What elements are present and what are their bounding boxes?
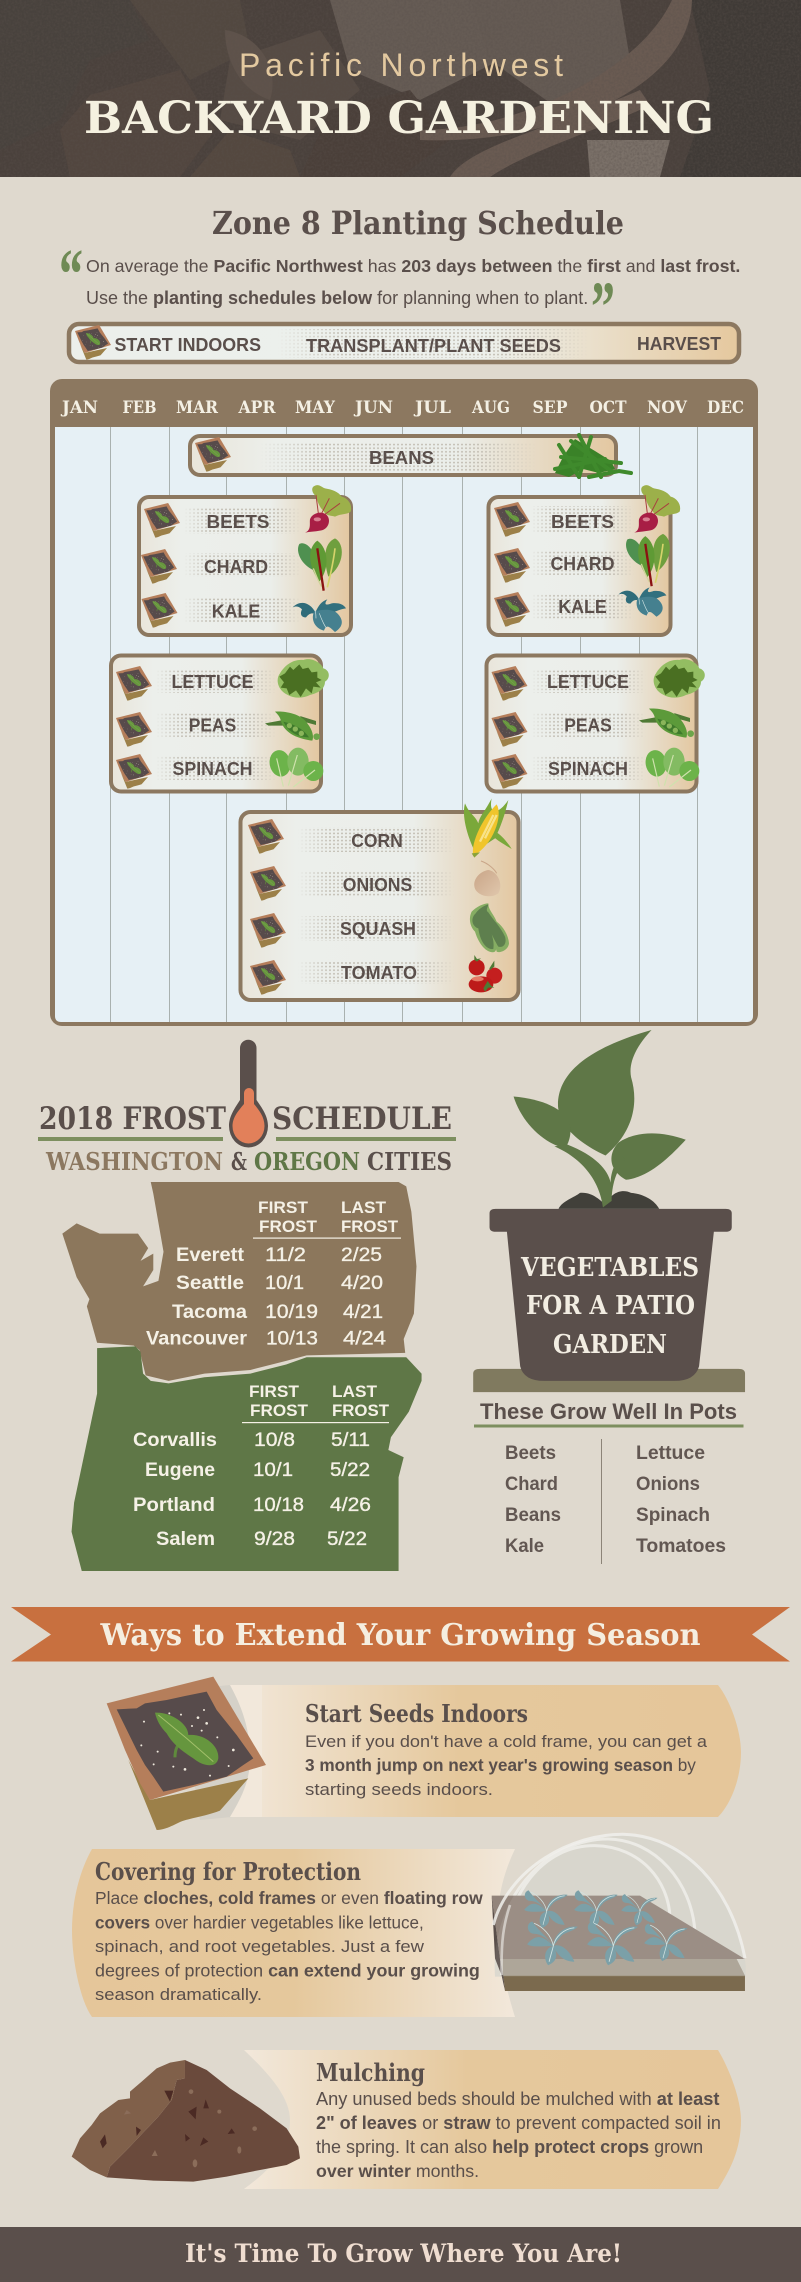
halftone band (278, 329, 588, 358)
map: Oregon frost table (72, 1346, 422, 1571)
icon: plant and pot (473, 1030, 745, 1392)
tip: covering for protection (72, 1833, 746, 2017)
heading: Zone 8 Planting Schedule: Zone 8 Planting Schedule (212, 204, 624, 242)
crop box: beets chard kale, spring: KALE (212, 600, 260, 622)
month labels: OCT (590, 398, 627, 417)
legend: transplant: TRANSPLANT/PLANT SEEDS (306, 336, 561, 356)
icon: cold frame (492, 1833, 746, 1991)
frost schedule heading: SCHEDULE (272, 1101, 452, 1137)
thermometer (229, 1040, 268, 1148)
subheading: Washington & Oregon cities: & (231, 1147, 247, 1176)
crop row: beans (190, 435, 631, 477)
crop box: lettuce peas spinach, spring: PEAS (189, 714, 236, 736)
map: Oregon frost table: 10/8 (254, 1429, 295, 1451)
month labels: MAR (176, 398, 218, 417)
pot vegetable list: Chard (505, 1474, 558, 1495)
crop box: beets chard kale, fall (488, 485, 680, 635)
map: Washington frost table: FROST (341, 1217, 399, 1236)
tip: start seeds indoors: 3 month jump on next year's growing season by (305, 1755, 696, 1775)
pot label: FOR A PATIO (526, 1291, 695, 1321)
list heading: These Grow Well In Pots (480, 1399, 737, 1424)
crop box: lettuce peas spinach, spring (111, 656, 329, 792)
pot label: GARDEN (553, 1330, 667, 1360)
month labels: FEB (122, 398, 157, 417)
map: Oregon frost table: 9/28 (254, 1528, 295, 1550)
frost schedule heading (38, 1040, 456, 1176)
month labels: JAN (60, 398, 98, 417)
map: Washington frost table: 11/2 (265, 1244, 306, 1266)
footer: It's Time To Grow Where You Are! (185, 2239, 622, 2268)
crop row: beans: BEANS (369, 447, 434, 468)
month labels (60, 398, 744, 417)
crop box: corn onions squash tomato: SQUASH (340, 918, 416, 939)
pot label (520, 1253, 699, 1360)
map: Oregon frost table: FROST (332, 1401, 390, 1420)
tip: covering for protection: covers over hardier vegetables like lettuce, (95, 1914, 424, 1932)
icon: seedling tray (75, 325, 111, 360)
map: Oregon frost table: Salem (156, 1528, 215, 1550)
crop box: lettuce peas spinach, spring: SPINACH (172, 758, 252, 779)
crop box: beets chard kale, fall: KALE (558, 596, 607, 617)
main title: BACKYARD GARDENING (84, 93, 714, 144)
tip: mulching: the spring. It can also help protect crops grown (316, 2137, 703, 2157)
legend bar (69, 324, 739, 362)
month labels: AUG (471, 398, 510, 417)
pot vegetable list: Tomatoes (636, 1536, 726, 1557)
tip: mulching (72, 2050, 741, 2189)
pot vegetable list (505, 1443, 726, 1557)
month labels: JUN (353, 398, 393, 417)
legend: start indoors: START INDOORS (114, 335, 261, 355)
map: Washington frost table: LAST (341, 1198, 387, 1217)
tip: start seeds indoors: Start Seeds Indoors (305, 1699, 528, 1728)
map: Oregon frost table: 10/18 (253, 1494, 304, 1516)
icon: seed tray (107, 1677, 266, 1830)
quote text line one: On average the Pacific Northwest has 203 days between the first and last frost. (86, 256, 740, 276)
tip: covering for protection: Covering for Protection (95, 1857, 361, 1886)
map: Washington frost table: 4/21 (343, 1301, 383, 1323)
tip: covering for protection: degrees of protection can extend your growing (95, 1960, 480, 1980)
crop box: beets chard kale, spring: BEETS (206, 511, 270, 532)
month labels: NOV (647, 398, 688, 417)
map: Washington frost table: 10/19 (265, 1301, 318, 1323)
pot label: VEGETABLES (520, 1253, 699, 1283)
map: Washington frost table: FROST (259, 1217, 318, 1236)
crop box: lettuce peas spinach, fall (486, 656, 705, 792)
month labels: JUL (413, 398, 451, 417)
map: Washington frost table: 2/25 (341, 1244, 382, 1266)
map: Oregon frost table: 5/22 (327, 1528, 367, 1550)
ribbon banner (11, 1607, 790, 1662)
header photo banner (0, 0, 801, 177)
crop box: corn onions squash tomato: TOMATO (341, 962, 417, 983)
map: Oregon frost table: 10/1 (253, 1459, 293, 1481)
pot vegetable list: Kale (505, 1536, 544, 1557)
crop box: lettuce peas spinach, spring: LETTUCE (172, 671, 254, 692)
month labels: MAY (295, 398, 335, 417)
month labels: DEC (707, 398, 744, 417)
crop box: beets chard kale, spring: CHARD (204, 556, 268, 577)
tip: start seeds indoors: Even if you don't have a cold frame, you can get a (305, 1732, 708, 1751)
map: Washington frost table: 4/20 (341, 1272, 383, 1294)
map: Washington frost table: 4/24 (343, 1328, 386, 1350)
quote text line two: Use the planting schedules below for planning when to plant. (86, 288, 588, 308)
subheading: Washington & Oregon cities (45, 1147, 452, 1176)
map: Washington frost table: Seattle (176, 1272, 244, 1294)
crop box: lettuce peas spinach, fall: LETTUCE (547, 671, 629, 692)
subheading: Washington & Oregon cities: OREGON (254, 1147, 360, 1176)
month labels: APR (238, 398, 276, 417)
intro quote (59, 234, 740, 347)
ribbon banner: Ways to Extend Your Growing Season (100, 1618, 701, 1653)
tip: mulching: Any unused beds should be mulched with at least (316, 2089, 719, 2109)
planting calendar (50, 379, 758, 1026)
map: Washington frost table: Tacoma (172, 1301, 247, 1323)
tip: covering for protection: spinach, and root vegetables. Just a few (95, 1937, 425, 1956)
pot vegetable list: Lettuce (636, 1443, 705, 1464)
icon: mulch pile (72, 2060, 300, 2182)
closing quote mark: ” (591, 267, 615, 347)
crop box: corn onions squash tomato: CORN (351, 830, 403, 851)
map: Oregon frost table: LAST (332, 1382, 378, 1401)
crop box: lettuce peas spinach, fall: SPINACH (548, 758, 628, 779)
subheading: Washington & Oregon cities: CITIES (367, 1147, 452, 1176)
map: Washington frost table: 10/13 (266, 1328, 318, 1350)
map: Washington frost table (62, 1182, 416, 1381)
pot vegetable list: Beans (505, 1505, 561, 1526)
map: Washington frost table: 10/1 (265, 1272, 304, 1294)
tip: mulching: Mulching (316, 2058, 425, 2087)
pot vegetable list: Onions (636, 1474, 700, 1495)
crop box: beets chard kale, spring (139, 485, 351, 635)
map: Oregon frost table: FROST (250, 1401, 309, 1420)
crop box: corn onions squash tomato: ONIONS (343, 874, 412, 895)
pot vegetable list: Spinach (636, 1505, 710, 1526)
month labels: SEP (532, 398, 568, 417)
map: Oregon frost table: Eugene (145, 1459, 215, 1481)
map: Oregon frost table: FIRST (249, 1382, 300, 1401)
frost schedule heading: 2018 FROST (39, 1101, 226, 1137)
subheading: Washington & Oregon cities: WASHINGTON (45, 1147, 223, 1176)
tip: covering for protection: Place cloches, cold frames or even floating row (95, 1888, 483, 1908)
crop box: lettuce peas spinach, fall: PEAS (564, 714, 612, 736)
map: Washington frost table: Everett (176, 1244, 245, 1266)
map: Oregon frost table: 5/11 (331, 1429, 370, 1451)
map: Oregon frost table: Portland (133, 1494, 215, 1516)
opening quote mark: “ (59, 234, 83, 314)
tip: mulching: over winter months. (316, 2161, 479, 2181)
subtitle: Pacific Northwest (239, 47, 563, 83)
crop box: beets chard kale, fall: CHARD (550, 553, 614, 574)
map: Oregon frost table: Corvallis (133, 1429, 217, 1451)
tip: mulching: 2" of leaves or straw to prevent compacted soil in (316, 2113, 721, 2133)
tip: start seeds indoors: starting seeds indoors. (305, 1780, 493, 1799)
crop box: beets chard kale, fall: BEETS (551, 511, 614, 532)
map: Oregon frost table: 4/26 (330, 1494, 371, 1516)
map: Washington frost table: Vancouver (146, 1328, 247, 1350)
crop box: corn onions squash tomato (240, 798, 518, 1000)
map: Oregon frost table: 5/22 (330, 1459, 370, 1481)
footer (0, 2227, 801, 2282)
potted plant panel (473, 1030, 745, 1564)
tip: covering for protection: season dramatically. (95, 1985, 262, 2004)
tip: start seeds indoors (107, 1677, 741, 1830)
map: Washington frost table: FIRST (258, 1198, 309, 1217)
pot vegetable list: Beets (505, 1443, 556, 1464)
legend: harvest: HARVEST (637, 334, 721, 354)
